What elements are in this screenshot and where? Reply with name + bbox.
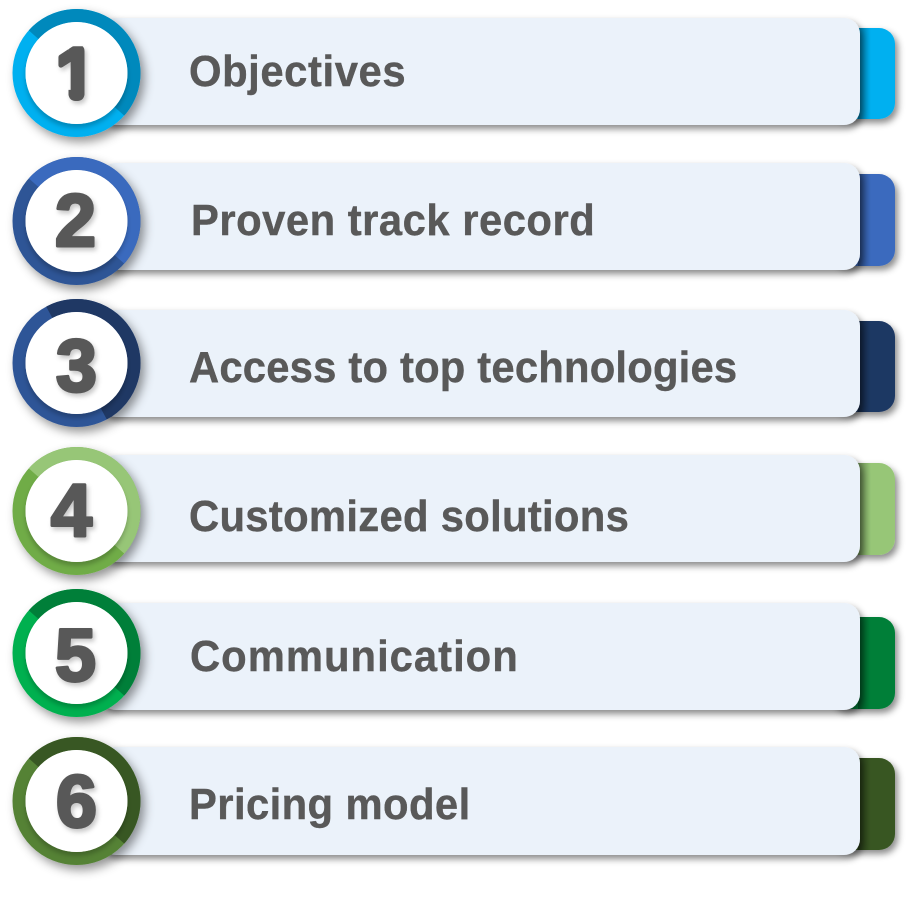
row 4: Customized solutions <box>19 454 895 568</box>
number badge 3: 3 <box>56 324 97 407</box>
side tab <box>830 463 895 555</box>
label text: Pricing model <box>189 780 470 829</box>
number badge 3 <box>19 305 134 420</box>
label text: Communication <box>190 632 518 681</box>
number badge 4: 4 <box>51 469 92 552</box>
label bar <box>100 18 860 125</box>
row 2: Proven track record <box>19 163 895 278</box>
label bar <box>100 747 860 855</box>
row 5: Communication <box>19 596 895 710</box>
number badge 6: 6 <box>56 760 97 843</box>
row 6: Pricing model <box>19 744 895 858</box>
label bar <box>100 455 860 562</box>
row 1: Objectives <box>19 16 895 130</box>
number badge 1: 1 <box>56 33 97 116</box>
number badge 5: 5 <box>55 614 96 697</box>
number badge 2 <box>19 164 134 278</box>
label bar <box>100 603 860 710</box>
side tab <box>830 174 895 266</box>
side tab <box>830 321 895 412</box>
label text: Objectives <box>189 47 406 96</box>
side tab <box>830 28 895 119</box>
label bar <box>100 163 860 270</box>
number badge 5 <box>19 596 134 710</box>
number badge 6 <box>19 744 134 858</box>
label text: Access to top technologies <box>189 343 737 392</box>
label bar <box>100 310 860 417</box>
label text: Proven track record <box>191 196 595 245</box>
side tab <box>830 617 895 709</box>
number badge 1 <box>19 16 134 130</box>
number badge 4 <box>19 454 134 568</box>
number badge 2: 2 <box>55 179 96 262</box>
row 3: Access to top technologies <box>19 305 895 420</box>
side tab <box>830 758 895 850</box>
label text: Customized solutions <box>189 492 629 541</box>
